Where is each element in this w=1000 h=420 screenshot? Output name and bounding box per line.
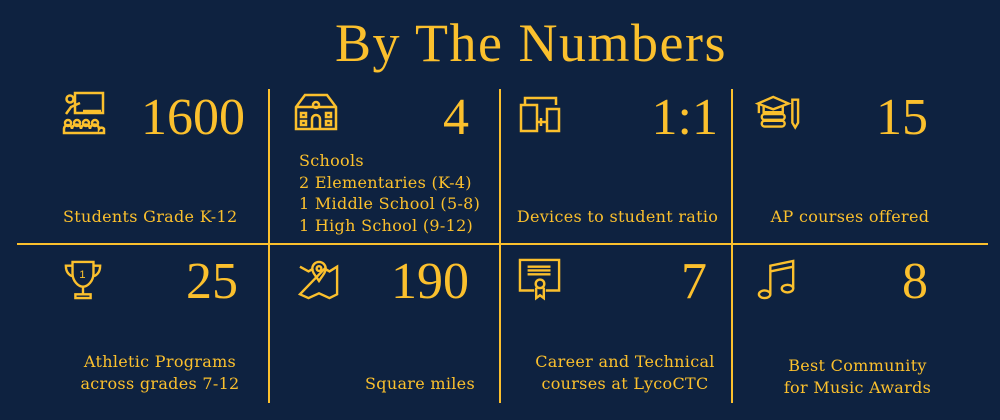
number: 7 — [681, 253, 707, 310]
number: 8 — [902, 253, 928, 310]
grid lines — [17, 243, 988, 245]
label — [299, 151, 480, 234]
panel: students — [62, 89, 245, 226]
panel: athletics — [64, 253, 240, 392]
title: By The Numbers — [335, 13, 727, 73]
label: Career and Technical — [535, 352, 715, 371]
label: Devices to student ratio — [517, 207, 718, 226]
number: 4 — [443, 89, 469, 146]
number: 1:1 — [652, 89, 718, 146]
label: AP courses offered — [771, 207, 929, 226]
label: Students Grade K-12 — [63, 207, 237, 226]
panel: square miles — [298, 253, 475, 393]
label — [784, 356, 931, 396]
label — [80, 352, 240, 392]
icon: certificate — [518, 258, 560, 300]
label: for Music Awards — [784, 378, 931, 396]
panel: AP — [754, 89, 929, 226]
number: 1600 — [141, 89, 245, 146]
number: 190 — [391, 253, 469, 310]
icon: devices — [520, 96, 560, 132]
label: 1 High School (9-12) — [299, 216, 473, 234]
label: 2 Elementaries (K-4) — [299, 172, 472, 192]
label: across grades 7-12 — [80, 374, 240, 392]
icon: trophy: 1 — [79, 269, 86, 281]
label: courses at LycoCTC — [541, 374, 709, 392]
number: 15 — [876, 89, 928, 146]
panel: career — [518, 253, 715, 392]
label: Square miles — [365, 374, 475, 393]
label: Schools — [299, 151, 364, 170]
icon: trophy — [64, 260, 102, 300]
label: Best Community — [788, 356, 927, 375]
label: 1 Middle School (5-8) — [299, 194, 480, 213]
panel: schools — [294, 89, 480, 234]
icon: books cap — [754, 96, 800, 130]
panel: music — [758, 253, 931, 396]
icon: teacher — [62, 92, 106, 134]
label: Athletic Programs — [84, 352, 236, 371]
icon: music note — [758, 260, 794, 300]
icon: map — [298, 260, 338, 300]
number: 25 — [186, 253, 238, 310]
label — [535, 352, 715, 392]
icon: school — [294, 94, 338, 130]
panel: devices — [517, 89, 718, 226]
